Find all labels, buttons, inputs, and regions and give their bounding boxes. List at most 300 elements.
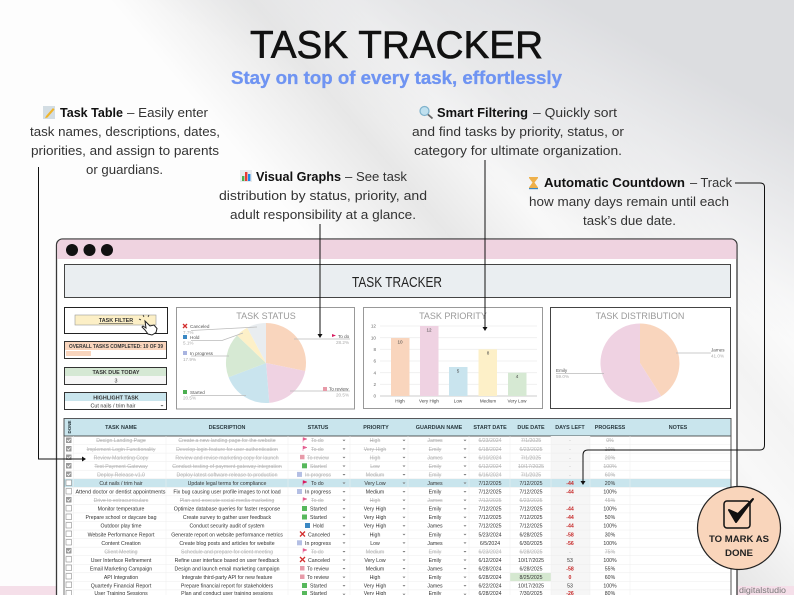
row 11: 7/12/2025 — [478, 524, 502, 530]
row 4 — [66, 463, 617, 470]
legend: to do: To do — [338, 334, 350, 339]
row 5: Deploy Release v1.0 — [97, 472, 145, 478]
row 12: Canceled — [308, 532, 330, 538]
chart: task priority bars — [364, 308, 542, 408]
bar: very high: 12 — [426, 328, 432, 332]
y axis labels: 6 — [373, 359, 376, 364]
pie slices — [226, 323, 306, 403]
callout: automatic countdown: Automatic Countdown — [544, 175, 685, 190]
legend: in progress: In progress — [190, 351, 214, 356]
footer band — [0, 586, 794, 595]
row 2: Emily — [429, 447, 442, 453]
row 14: Schedule and prepare for client meeting — [181, 549, 273, 555]
overall tasks completed: OVERALL TASKS COMPLETED: 10 OF 39 — [69, 344, 163, 350]
row 12: High — [370, 532, 380, 538]
window header bar — [57, 240, 736, 259]
row 7: Fix bug causing user profile images to not load — [173, 490, 281, 496]
callout badge: to mark as done: DONE — [725, 548, 753, 559]
row 16: 6/28/2025 — [519, 566, 543, 572]
row 11: Very High — [364, 524, 386, 530]
table header: STATUS — [308, 425, 329, 431]
bar: very low: 4 — [516, 374, 519, 379]
row 4: 6/12/2024 — [478, 464, 502, 470]
row 11: -44 — [566, 524, 574, 530]
row 15: Emily — [429, 558, 442, 564]
row 10: 7/12/2025 — [478, 515, 502, 521]
spreadsheet window — [56, 239, 737, 595]
row 18: 6/22/2024 — [478, 584, 502, 590]
callout: smart filtering: category for ultimate organization. — [414, 143, 622, 158]
table header: START DATE — [473, 425, 507, 431]
row 11 — [66, 522, 617, 530]
row 14: Client Meeting — [104, 549, 138, 555]
row 7: Medium — [366, 490, 384, 496]
row 8: High — [370, 498, 380, 504]
row 1 — [66, 438, 614, 444]
legend: started — [183, 390, 205, 400]
row 13: Create blog posts and articles for website — [179, 541, 275, 547]
callout: automatic countdown: how many days remain until each — [529, 194, 729, 209]
row 16 — [66, 565, 616, 572]
row 12: Generate report on website performance metrics — [171, 532, 283, 538]
row 6 highlighted: 7/12/2025 — [519, 481, 543, 487]
row 10: Emily — [429, 515, 442, 521]
row 15: Canceled — [308, 558, 330, 564]
row 9: 7/12/2025 — [519, 507, 543, 513]
row 7: 7/12/2025 — [519, 490, 543, 496]
task due today — [64, 368, 166, 384]
row 13: 100% — [603, 541, 617, 547]
row 14: Medium — [366, 549, 384, 555]
row 9: Optimize database queries for faster response — [174, 507, 280, 513]
legend: to do: 28.2% — [336, 340, 349, 345]
bar: low — [449, 367, 468, 404]
bar: very low — [508, 373, 527, 404]
legend: canceled — [183, 324, 210, 335]
row 16: 6/28/2024 — [478, 566, 502, 572]
task filter box: TASK FILTER — [99, 318, 133, 324]
overall tasks completed — [64, 342, 166, 358]
row 2 — [66, 446, 616, 453]
row 14: 75% — [605, 549, 616, 555]
row 3: High — [370, 455, 380, 461]
row 8: 7/12/2025 — [478, 498, 502, 504]
label: james — [711, 348, 725, 358]
row 14 — [66, 548, 616, 555]
row 13: 6/5/2024 — [480, 541, 500, 547]
row 15: Refine user interface based on user feedback — [175, 558, 280, 564]
callout: automatic countdown — [529, 175, 732, 228]
row 13 — [66, 540, 617, 547]
row 13: 6/30/2025 — [519, 541, 543, 547]
row 18: 10/17/2025 — [518, 584, 544, 590]
row 9: -44 — [566, 507, 574, 513]
highlight task — [64, 392, 166, 410]
row 4: 100% — [603, 464, 617, 470]
row 11: 100% — [603, 524, 617, 530]
subtitle: Stay on top of every task, effortlessly — [231, 68, 562, 88]
callout badge: to mark as done: TO MARK AS — [709, 534, 769, 545]
row 15: 53 — [567, 558, 573, 564]
legend: in progress — [183, 351, 214, 362]
legend: canceled: Canceled — [190, 324, 210, 329]
y axis labels: 10 — [371, 335, 376, 340]
row 15: 6/12/2024 — [478, 558, 502, 564]
row 12: 6/28/2025 — [519, 532, 543, 538]
callout: visual graphs — [219, 169, 427, 222]
chart: task distribution pie — [550, 308, 730, 408]
row 10: 7/12/2025 — [519, 515, 543, 521]
chart: task priority bars: TASK PRIORITY — [419, 311, 487, 321]
callout: task table: Task Table — [60, 105, 123, 120]
label: james: 41.0% — [711, 354, 724, 358]
row 18: James — [427, 584, 443, 590]
y axis labels: 2 — [373, 382, 376, 387]
row 16: 55% — [605, 566, 616, 572]
row 9: 7/12/2025 — [478, 507, 502, 513]
legend: to review — [323, 386, 349, 398]
window frame — [56, 239, 737, 595]
sheet title bar — [64, 264, 730, 298]
window buttons — [66, 244, 113, 256]
row 1: James — [427, 438, 443, 444]
row 1: 6/23/2024 — [478, 438, 502, 444]
arrow: smart filtering — [482, 160, 488, 331]
legend: in progress: 17.9% — [183, 357, 196, 362]
row 8: To do — [311, 498, 324, 504]
row 18: Quarterly Financial Report — [91, 584, 152, 590]
row 1: Create a new landing page for the website — [178, 438, 276, 444]
row 2: 6/18/2024 — [478, 447, 502, 453]
legend: hold: Hold — [190, 335, 200, 340]
row 17: Integrate third-party API for new feature — [182, 575, 273, 581]
row 15 — [66, 556, 617, 564]
legend: to do — [332, 334, 350, 345]
row 15: 100% — [603, 558, 617, 564]
callout: task table: task names, descriptions, dates, — [30, 124, 220, 139]
row 4: Low — [370, 464, 380, 470]
row 6 highlighted: 20% — [605, 481, 616, 487]
row 6 highlighted: Update legal terms for compliance — [188, 481, 266, 487]
row 14: 6/28/2025 — [519, 549, 543, 555]
row 8: Drive to extracurriculars — [94, 498, 149, 504]
row 9: Very High — [364, 507, 386, 513]
row 7 — [66, 488, 617, 496]
bar: high: High — [395, 398, 405, 404]
bar: medium: Medium — [480, 398, 496, 404]
row 16: Email Marketing Campaign — [90, 566, 152, 572]
row 9 — [66, 506, 617, 513]
table header: DAYS LEFT — [555, 425, 585, 431]
callout: smart filtering — [412, 105, 625, 158]
icon: checkbox — [724, 499, 753, 528]
row 2: Very High — [364, 447, 386, 453]
highlight task: Cut nails / trim hair — [91, 404, 136, 410]
table header: PRIORITY — [363, 425, 389, 431]
row 16: -58 — [566, 566, 574, 572]
row 11: Outdoor play time — [101, 524, 142, 530]
arrow: task table — [38, 167, 86, 462]
row 1: High — [370, 438, 380, 444]
bar: low: 5 — [457, 368, 460, 374]
row 13: Content Creation — [101, 541, 141, 547]
row 4: - — [569, 464, 571, 470]
row 10: Create survey to gather user feedback — [183, 515, 272, 521]
row 17: Emily — [429, 575, 442, 581]
row 10 — [66, 514, 616, 521]
row 11: 7/12/2025 — [519, 524, 543, 530]
row 10: -44 — [566, 515, 574, 521]
bar: high: 10 — [397, 340, 403, 344]
row 5: - — [569, 472, 571, 478]
table header: DONE — [67, 420, 72, 434]
row 18: 53 — [567, 584, 573, 590]
bar: very high: Very High — [419, 398, 439, 404]
row 18: Started — [310, 584, 327, 590]
bar: very high — [419, 326, 439, 404]
row 9: 100% — [603, 507, 617, 513]
legend: to review: To review — [329, 386, 349, 392]
row 2: Develop login feature for user authentication — [176, 447, 278, 453]
row 6 highlighted: -44 — [566, 481, 574, 487]
row 11: Conduct security audit of system — [190, 524, 264, 530]
row 16: Design and launch email marketing campaign — [175, 566, 280, 572]
legend: started: Started — [190, 390, 205, 395]
task table — [64, 418, 731, 595]
arrow: automatic countdown — [580, 183, 764, 485]
legend: to review: 20.5% — [336, 392, 349, 398]
row 4: Conduct testing of payment gateway integration — [172, 464, 282, 470]
table header: DUE DATE — [517, 425, 545, 431]
row 17: 0 — [569, 575, 572, 581]
y axis labels: 8 — [373, 347, 376, 352]
callout: smart filtering: – Quickly sort — [533, 105, 617, 120]
callout: task table: priorities, and assign to parents — [31, 143, 220, 158]
y axis labels: 0 — [373, 394, 376, 399]
row 2: 6/23/2025 — [519, 447, 543, 453]
row 12: 5/23/2024 — [478, 532, 502, 538]
table header — [64, 418, 731, 436]
highlight task: HIGHLIGHT TASK — [93, 396, 139, 402]
label: emily — [556, 368, 569, 379]
callout: automatic countdown: – Track — [690, 175, 732, 190]
row 5 — [66, 472, 616, 478]
row 8: 45% — [605, 498, 616, 504]
sheet title bar: TASK TRACKER — [352, 275, 442, 291]
row 12: -58 — [566, 532, 574, 538]
row 2: 10% — [605, 447, 616, 453]
row 8: James — [427, 498, 443, 504]
row 17: To review — [307, 575, 329, 581]
chart: task distribution pie: TASK DISTRIBUTION — [596, 311, 684, 321]
row 2: - — [569, 447, 571, 453]
row 5: 7/1/2025 — [521, 472, 541, 478]
bar: medium: 8 — [487, 350, 490, 356]
row 11: James — [427, 524, 443, 530]
icon: hourglass — [529, 177, 538, 189]
row 7: 7/12/2025 — [478, 490, 502, 496]
row 13: -56 — [566, 541, 574, 547]
row 15: 10/17/2025 — [518, 558, 544, 564]
row 7: Emily — [429, 490, 442, 496]
table header: NOTES — [669, 425, 688, 431]
row 7: Attend doctor or dentist appointments — [76, 490, 166, 496]
row 3: 7/1/2025 — [521, 455, 541, 461]
row 14: 6/23/2024 — [478, 549, 502, 555]
callout: visual graphs: distribution by status, priority, and — [219, 188, 427, 203]
callout: visual graphs: – See task — [345, 169, 407, 184]
row 10: Prepare school or daycare bag — [86, 515, 157, 521]
y axis labels: 4 — [373, 370, 376, 375]
bar: high — [391, 338, 410, 404]
row 15: User Interface Refinement — [91, 558, 152, 564]
row 3: James — [427, 455, 443, 461]
y axis labels — [371, 324, 376, 399]
callout: task table: or guardians. — [86, 162, 163, 177]
row 8 — [66, 497, 616, 504]
chart: task status pie: TASK STATUS — [236, 311, 296, 321]
legend: started: 20.5% — [183, 396, 196, 400]
watermark: digitalstudio — [739, 586, 787, 595]
callout: task table: – Easily enter — [127, 105, 209, 120]
table header: TASK NAME — [105, 425, 137, 431]
row 8: Plan and execute social media marketing — [180, 498, 274, 504]
row 1: 0% — [606, 438, 614, 444]
row 12: Website Performance Report — [88, 532, 155, 538]
row 5: 60% — [605, 472, 616, 478]
row 4: Started — [310, 464, 327, 470]
bar: low: Low — [454, 398, 463, 404]
y axis labels: 12 — [371, 324, 376, 329]
callout: task table — [30, 105, 220, 177]
row 7: -44 — [566, 490, 574, 496]
row 12 — [66, 531, 616, 538]
task filter box — [64, 308, 168, 335]
row 3: To review — [307, 455, 329, 461]
row 17: 6/28/2024 — [478, 575, 502, 581]
row 6 highlighted: Very Low — [364, 481, 386, 487]
row 8: 6/23/2025 — [519, 498, 543, 504]
row 1: - — [569, 438, 571, 444]
arrow: visual graphs — [318, 224, 322, 338]
callout: automatic countdown: task’s due date. — [583, 213, 676, 228]
row 2: Implement Login Functionality — [87, 447, 156, 453]
row 3: Review Marketing Copy — [94, 455, 149, 461]
row 17: API Integration — [104, 575, 138, 581]
row 16: James — [427, 566, 443, 572]
icon: memo and pencil — [43, 106, 55, 119]
label: emily: 59.0% — [556, 374, 569, 379]
chart: task status pie — [176, 308, 354, 409]
row 9: Started — [310, 507, 327, 513]
bar: medium — [478, 349, 497, 404]
row 17: High — [370, 575, 380, 581]
row 3: - — [569, 455, 571, 461]
row 6 highlighted: 7/12/2025 — [478, 481, 502, 487]
table header: GUARDIAN NAME — [416, 425, 463, 431]
row 1: To do — [311, 438, 324, 444]
icon: magnifier — [420, 106, 432, 118]
row 5: Emily — [429, 472, 442, 478]
row 4: Emily — [429, 464, 442, 470]
row 15: Very Low — [364, 558, 386, 564]
title: TASK TRACKER — [250, 24, 543, 67]
row 2: To do — [311, 447, 324, 453]
row 7: 100% — [603, 490, 617, 496]
row 6 highlighted: Cut nails / trim hair — [99, 481, 143, 487]
row 14: - — [569, 549, 571, 555]
bar: very low: Very Low — [508, 398, 527, 404]
row 18 — [66, 582, 617, 590]
row 1: Design Landing Page — [96, 438, 146, 444]
icon: pointing hand — [139, 315, 157, 335]
table header: DESCRIPTION — [209, 425, 246, 431]
legend: hold — [183, 335, 200, 346]
row 6 highlighted — [66, 480, 616, 487]
row 5: In progress — [305, 472, 331, 478]
callout badge: to mark as done — [698, 486, 780, 570]
icon: bar chart emoji — [240, 170, 252, 182]
row 1: 7/1/2025 — [521, 438, 541, 444]
row 13: James — [427, 541, 443, 547]
row 17 — [66, 574, 616, 581]
row 10: 50% — [605, 515, 616, 521]
row 3 — [66, 454, 616, 461]
row 14: To do — [311, 549, 324, 555]
row 5: Deploy latest software release to production — [177, 472, 278, 478]
row 7: In progress — [305, 490, 331, 496]
row 5: Medium — [366, 472, 384, 478]
legend: canceled: 7.7% — [183, 330, 193, 335]
row 10: Started — [310, 515, 327, 521]
row 13: In progress — [305, 541, 331, 547]
row 6 highlighted: To do — [311, 481, 324, 487]
callout: smart filtering: Smart Filtering — [437, 105, 528, 120]
row 16: Medium — [366, 566, 384, 572]
row 18: Very High — [364, 584, 386, 590]
row 6 highlighted: James — [427, 481, 443, 487]
row 5: 6/16/2024 — [478, 472, 502, 478]
row 14: Emily — [429, 549, 442, 555]
row 3: Review and revise marketing copy for launch — [175, 455, 279, 461]
row 18: 100% — [603, 584, 617, 590]
dropdown arrows — [342, 440, 466, 595]
row 17: 60% — [605, 575, 616, 581]
row 18: Prepare financial report for stakeholders — [181, 584, 274, 590]
row 4: 10/17/2025 — [518, 464, 544, 470]
row 4: Test Payment Gateway — [94, 464, 148, 470]
row 9: Monitor temperature — [98, 507, 144, 513]
row 3: 20% — [605, 455, 616, 461]
row 13: Low — [370, 541, 380, 547]
row 12: 30% — [605, 532, 616, 538]
task due today: 3 — [114, 378, 118, 384]
label: james: James — [711, 348, 725, 352]
row 10: Very High — [364, 515, 386, 521]
row 16: To review — [307, 566, 329, 572]
task due today: TASK DUE TODAY — [93, 370, 140, 376]
row 12: Emily — [429, 532, 442, 538]
row 17: 8/25/2025 — [519, 575, 543, 581]
row 11: Hold — [313, 524, 324, 530]
row 3: 6/10/2024 — [478, 455, 502, 461]
callout: smart filtering: and find tasks by priority, status, or — [412, 124, 625, 139]
table header: PROGRESS — [595, 425, 626, 431]
callout: visual graphs: Visual Graphs — [256, 169, 341, 184]
label: emily: Emily — [556, 368, 568, 373]
legend: hold: 5.1% — [183, 340, 193, 346]
row 19 — [66, 590, 616, 595]
